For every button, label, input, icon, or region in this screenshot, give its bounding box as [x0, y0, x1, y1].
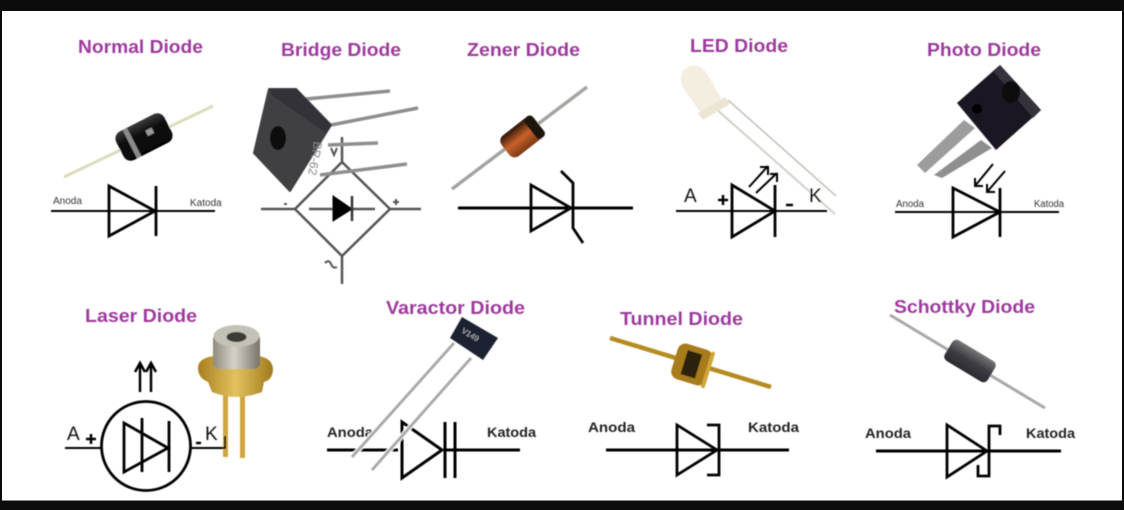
title: LED Diode: LED Diode	[690, 36, 788, 56]
panel: bridge diode	[254, 40, 421, 284]
panel: photo diode	[895, 40, 1064, 237]
panel: tunnel diode	[588, 309, 799, 475]
photo: bridge rectifier: BR-62	[305, 140, 325, 177]
label: Katoda: Katoda	[487, 424, 536, 440]
photo: varactor component	[352, 317, 498, 470]
photo: schottky diode	[890, 315, 1045, 408]
schematic symbol	[261, 137, 421, 284]
label: K: K	[205, 424, 218, 445]
photo: glass zener diode	[452, 87, 587, 189]
schematic symbol	[65, 363, 225, 490]
panel: LED diode	[676, 36, 836, 237]
schematic symbol	[895, 164, 1059, 237]
panel: normal diode	[51, 37, 222, 236]
schematic symbol	[876, 425, 1061, 477]
panel: schottky diode	[865, 297, 1075, 477]
label: A: A	[684, 186, 697, 207]
schematic symbol	[458, 171, 633, 243]
title: Zener Diode: Zener Diode	[467, 40, 580, 60]
title: Normal Diode: Normal Diode	[78, 37, 203, 57]
label: Anoda: Anoda	[327, 424, 373, 440]
label: Anoda: Anoda	[588, 419, 635, 435]
label: A: A	[67, 424, 80, 445]
photo: laser diode can	[198, 325, 273, 458]
title: Photo Diode: Photo Diode	[927, 40, 1041, 60]
panel: laser diode	[65, 306, 273, 490]
label: Katoda: Katoda	[748, 419, 799, 435]
schematic symbol	[676, 166, 827, 237]
schematic symbol	[606, 425, 789, 475]
photo: tunnel diode	[610, 338, 771, 389]
photo: varactor component: V149	[460, 326, 481, 344]
title: Schottky Diode: Schottky Diode	[894, 297, 1035, 317]
photo: axial diode	[64, 106, 213, 177]
label: Anoda: Anoda	[865, 425, 911, 441]
photo: LED	[681, 65, 836, 214]
title: Varactor Diode: Varactor Diode	[386, 298, 525, 318]
schematic symbol	[327, 422, 520, 478]
label: K: K	[809, 186, 822, 207]
panel: varactor diode	[327, 298, 536, 478]
photo: photodiode module	[917, 65, 1041, 178]
label: Anoda: Anoda	[896, 199, 924, 210]
title: Laser Diode: Laser Diode	[85, 306, 197, 326]
schematic symbol	[51, 186, 215, 236]
photo: bridge rectifier	[254, 89, 418, 191]
label: Katoda: Katoda	[1034, 199, 1064, 210]
title: Tunnel Diode: Tunnel Diode	[620, 309, 743, 329]
label: Anoda: Anoda	[53, 196, 82, 207]
label: Katoda: Katoda	[1026, 425, 1075, 441]
label: Katoda: Katoda	[190, 198, 222, 209]
panel: zener diode	[452, 40, 633, 243]
title: Bridge Diode: Bridge Diode	[281, 40, 401, 60]
